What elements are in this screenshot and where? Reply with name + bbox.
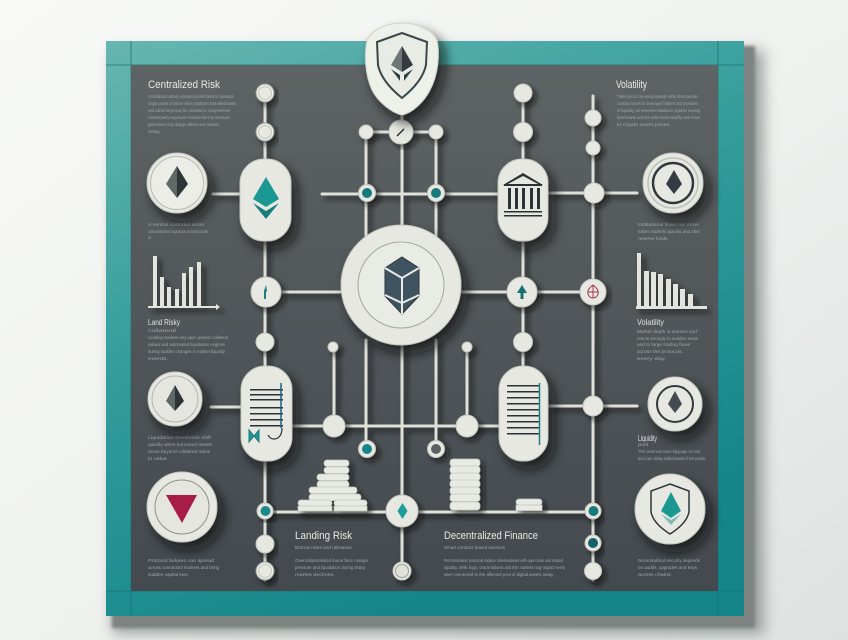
text block: caption under shield coin [638,558,701,578]
text block: caption under warning coin: sudden capital loss. [148,572,189,578]
text block: volatility middle: Volatility [637,318,664,327]
node: red mark [580,279,606,305]
text block: liquidity: pool [638,442,648,448]
text block: volatility top: of liquidity, as reserves rebalance against moving [617,108,700,114]
text block: centralized risk: single points of failure when platforms halt withdrawals [148,101,236,107]
text block: centralized risk: governance may change without user consent [148,122,219,128]
node: teal diamond [386,495,418,527]
text block: lending risk: Overcollateralised loans face margin [295,558,368,564]
text block: volatility middle [637,318,699,362]
shield emblem [365,23,438,115]
text block: caption under second coin: move beyond collateral ratios [148,449,211,455]
coin: ether right top [643,153,703,213]
text block: caption under ether coin: A central custodial asset [148,222,205,228]
frame shadow [112,46,764,634]
text block: decentralized finance: Smart contract based services [444,545,506,551]
text block: land risk: Lending markets rely upon posted collateral [148,335,228,341]
teal frame [106,41,744,616]
text block: caption under right coin: token markets quickly and alter [638,229,700,235]
nodes: top junction row [359,120,443,144]
text block: volatility middle: Market depth is uneven and [637,329,697,335]
text block: caption under right coin: Institutional flows can move [638,222,699,228]
text block: land risk: Land Risky [148,318,180,327]
nodes: teal junctions [358,184,444,458]
text block: caption under warning coin [148,558,219,578]
text block: decentralized finance [444,530,565,578]
nodes: teal right [585,503,601,551]
text block: land risk: during sudden changes in market liquidity [148,349,226,355]
coin stack: middle [450,459,480,510]
text block: liquidity: Thin reserves raise slippage on exit [638,449,701,455]
text block: lending risk [295,530,368,578]
coin: warning triangle [147,472,217,542]
text block: caption under right coin [638,222,700,242]
text block: caption under shield coin: across chains. [638,572,672,578]
text block: volatility top: in crypto asset prices. [617,122,671,128]
text block: decentralized finance: user connected to the affected pool of digital assets today. [444,572,554,578]
coin: ether left middle [148,372,202,426]
text block: centralized risk: Centralized Risk [148,79,220,91]
text block: caption under second coin [148,435,213,462]
text block: volatility middle: every day. [637,356,666,362]
text block: volatility middle: reacts strongly to sudden news [637,336,699,342]
coin stack: small [516,499,542,510]
coin: ether left top [147,153,207,213]
text block: land risk: values and automated liquidation engines [148,342,226,348]
coin stack: left [298,460,367,511]
text block: decentralized finance: Permissionless protocols replace intermediaries with open code and shared [444,558,563,564]
text block: land risk: collateral [148,328,176,334]
text block: volatility top: Token prices can swing sharply within short periods [617,94,698,100]
pill: bank [498,159,548,241]
text block: decentralized finance: liquidity, while bugs, oracle failures and thin markets may impact every [444,565,565,571]
text block: volatility top: benchmarks and thin order books amplify each move [617,115,700,121]
text block: caption under shield coin: on audits, upgrades and keys [638,565,698,571]
text block: lending risk: Landing Risk [295,530,352,542]
grey panel [131,65,718,591]
nodes: right columns [514,84,604,580]
bar chart: left [148,256,220,310]
text block: centralized risk: and admin keys may be misused or compromised [148,108,230,114]
text block: volatility top [616,79,700,128]
text block: caption under ether coin: concentrates exposure across pools [148,229,208,235]
text block: volatility top: Volatility [616,79,647,91]
node: teal left [257,503,273,519]
text block: lending risk: Borrow rates and utilisation [295,545,352,551]
text block: caption under second coin: Liquidation thresholds shift [148,435,212,441]
text block: centralized risk: today. [148,129,161,135]
pill: document right [499,366,548,461]
coin: ether right middle [648,377,702,431]
pill: ether [240,159,291,241]
text block: liquidity [638,434,705,462]
coin: shield [635,474,705,544]
text block: liquidity: Liquidity [638,434,657,443]
node: up arrow [507,277,537,307]
text block: land risk [148,318,228,362]
text block: caption under ether coin [148,222,208,241]
text block: caption under ether coin: a [148,236,151,241]
text block: caption under warning coin: Protocol failures can spread [148,558,214,564]
text block: volatility middle: and to large trading flows [637,342,691,348]
text block: centralized risk: counterparty exposure remains hard to measure [148,115,230,121]
text block: volatility middle: across the protocols. [637,349,683,355]
nodes: left column [256,84,274,580]
text block: centralized risk: Centralized custody exposes pooled funds to operators [148,94,234,100]
center hub [341,225,461,345]
connector network [211,93,637,580]
text block: land risk: events. [148,356,168,362]
bar chart: right [636,253,707,309]
text block: caption under right coin: reserve funds. [638,236,669,242]
node: arrow left [251,277,281,307]
text block: caption under second coin: quickly when borrowed assets [148,442,213,448]
text block: volatility top: causing losses for leveraged holders and providers [617,101,698,107]
nodes: pin heads [323,342,478,580]
text block: caption under second coin: in value [148,456,167,462]
text block: lending risk: market declines. [295,572,335,578]
text block: decentralized finance: Decentralized Finance [444,530,538,542]
pill: document left [241,366,292,461]
text block: caption under warning coin: across connected markets and bring [148,565,219,571]
text block: liquidity: and can delay withdrawals from pools [638,456,705,462]
text block: centralized risk [148,79,236,135]
text block: caption under shield coin: Decentralized security depends [638,558,701,564]
text block: lending risk: pressure and liquidation during sharp [295,565,365,571]
